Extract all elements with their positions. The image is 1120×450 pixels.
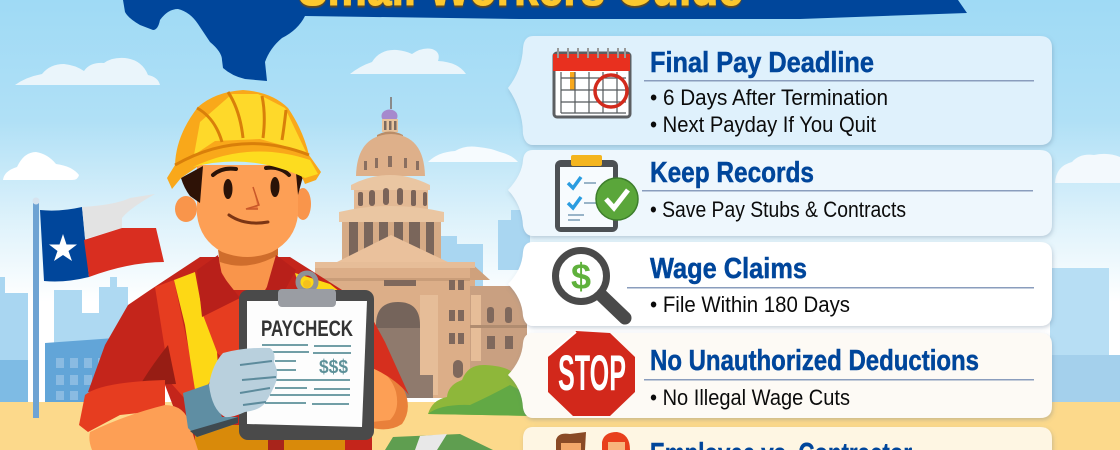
Texas flag	[32, 194, 164, 418]
heading: Final Pay Deadline	[650, 47, 874, 79]
worker character	[79, 90, 409, 450]
heading: No Unauthorized Deductions	[650, 345, 979, 377]
worker: neck	[218, 245, 278, 290]
panel: no unauthorized deductions	[508, 331, 1052, 418]
bullet: no illegal cuts: • No Illegal Wage Cuts	[650, 385, 850, 410]
sandy ground	[0, 402, 1120, 450]
icon: two people	[556, 432, 630, 450]
icon: checklist clipboard	[555, 155, 638, 232]
worker: shirt and torso	[88, 257, 372, 450]
city skyline	[0, 210, 1120, 402]
bundle of cash	[385, 434, 493, 450]
bullet: file within: • File Within 180 Days	[650, 292, 850, 317]
panel: wage claims	[508, 242, 1052, 326]
worker: nose and smile	[246, 187, 259, 209]
worker: hair	[181, 162, 306, 203]
clouds	[3, 49, 1120, 183]
amount: $$$	[319, 357, 348, 378]
worker: clipboard with paycheck	[239, 273, 374, 440]
worker: rolled sleeve and arm	[79, 380, 165, 432]
Texas state banner	[123, 0, 967, 81]
icon: stop sign: STOP	[558, 345, 626, 401]
worker: ears	[175, 196, 197, 222]
panel: final pay deadline	[508, 36, 1052, 145]
worker: glove	[183, 384, 238, 437]
heading: Keep Records	[650, 157, 814, 189]
bullet: pay stubs: • Save Pay Stubs & Contracts	[650, 197, 906, 222]
icon: magnifying glass	[556, 250, 625, 318]
worker: hard hat	[167, 90, 321, 189]
worker: safety vest	[174, 272, 218, 390]
worker: eyes and brows	[224, 179, 232, 199]
worker: face	[197, 165, 298, 257]
bullet: six days: • 6 Days After Termination	[650, 85, 888, 110]
bullet: next payday: • Next Payday If You Quit	[650, 112, 877, 137]
icon: calendar	[553, 48, 630, 117]
icon: stop sign	[548, 331, 635, 416]
paycheck label: PAYCHECK	[261, 316, 353, 341]
worker: far arm	[372, 368, 408, 429]
panel: keep records	[508, 150, 1052, 236]
panel: employee vs contractor	[523, 427, 1052, 450]
green shrub	[428, 365, 532, 416]
Texas capitol building	[315, 97, 527, 398]
worker: collar	[197, 255, 240, 317]
icon: magnifying glass: $	[571, 256, 591, 297]
heading: Wage Claims	[650, 253, 807, 285]
